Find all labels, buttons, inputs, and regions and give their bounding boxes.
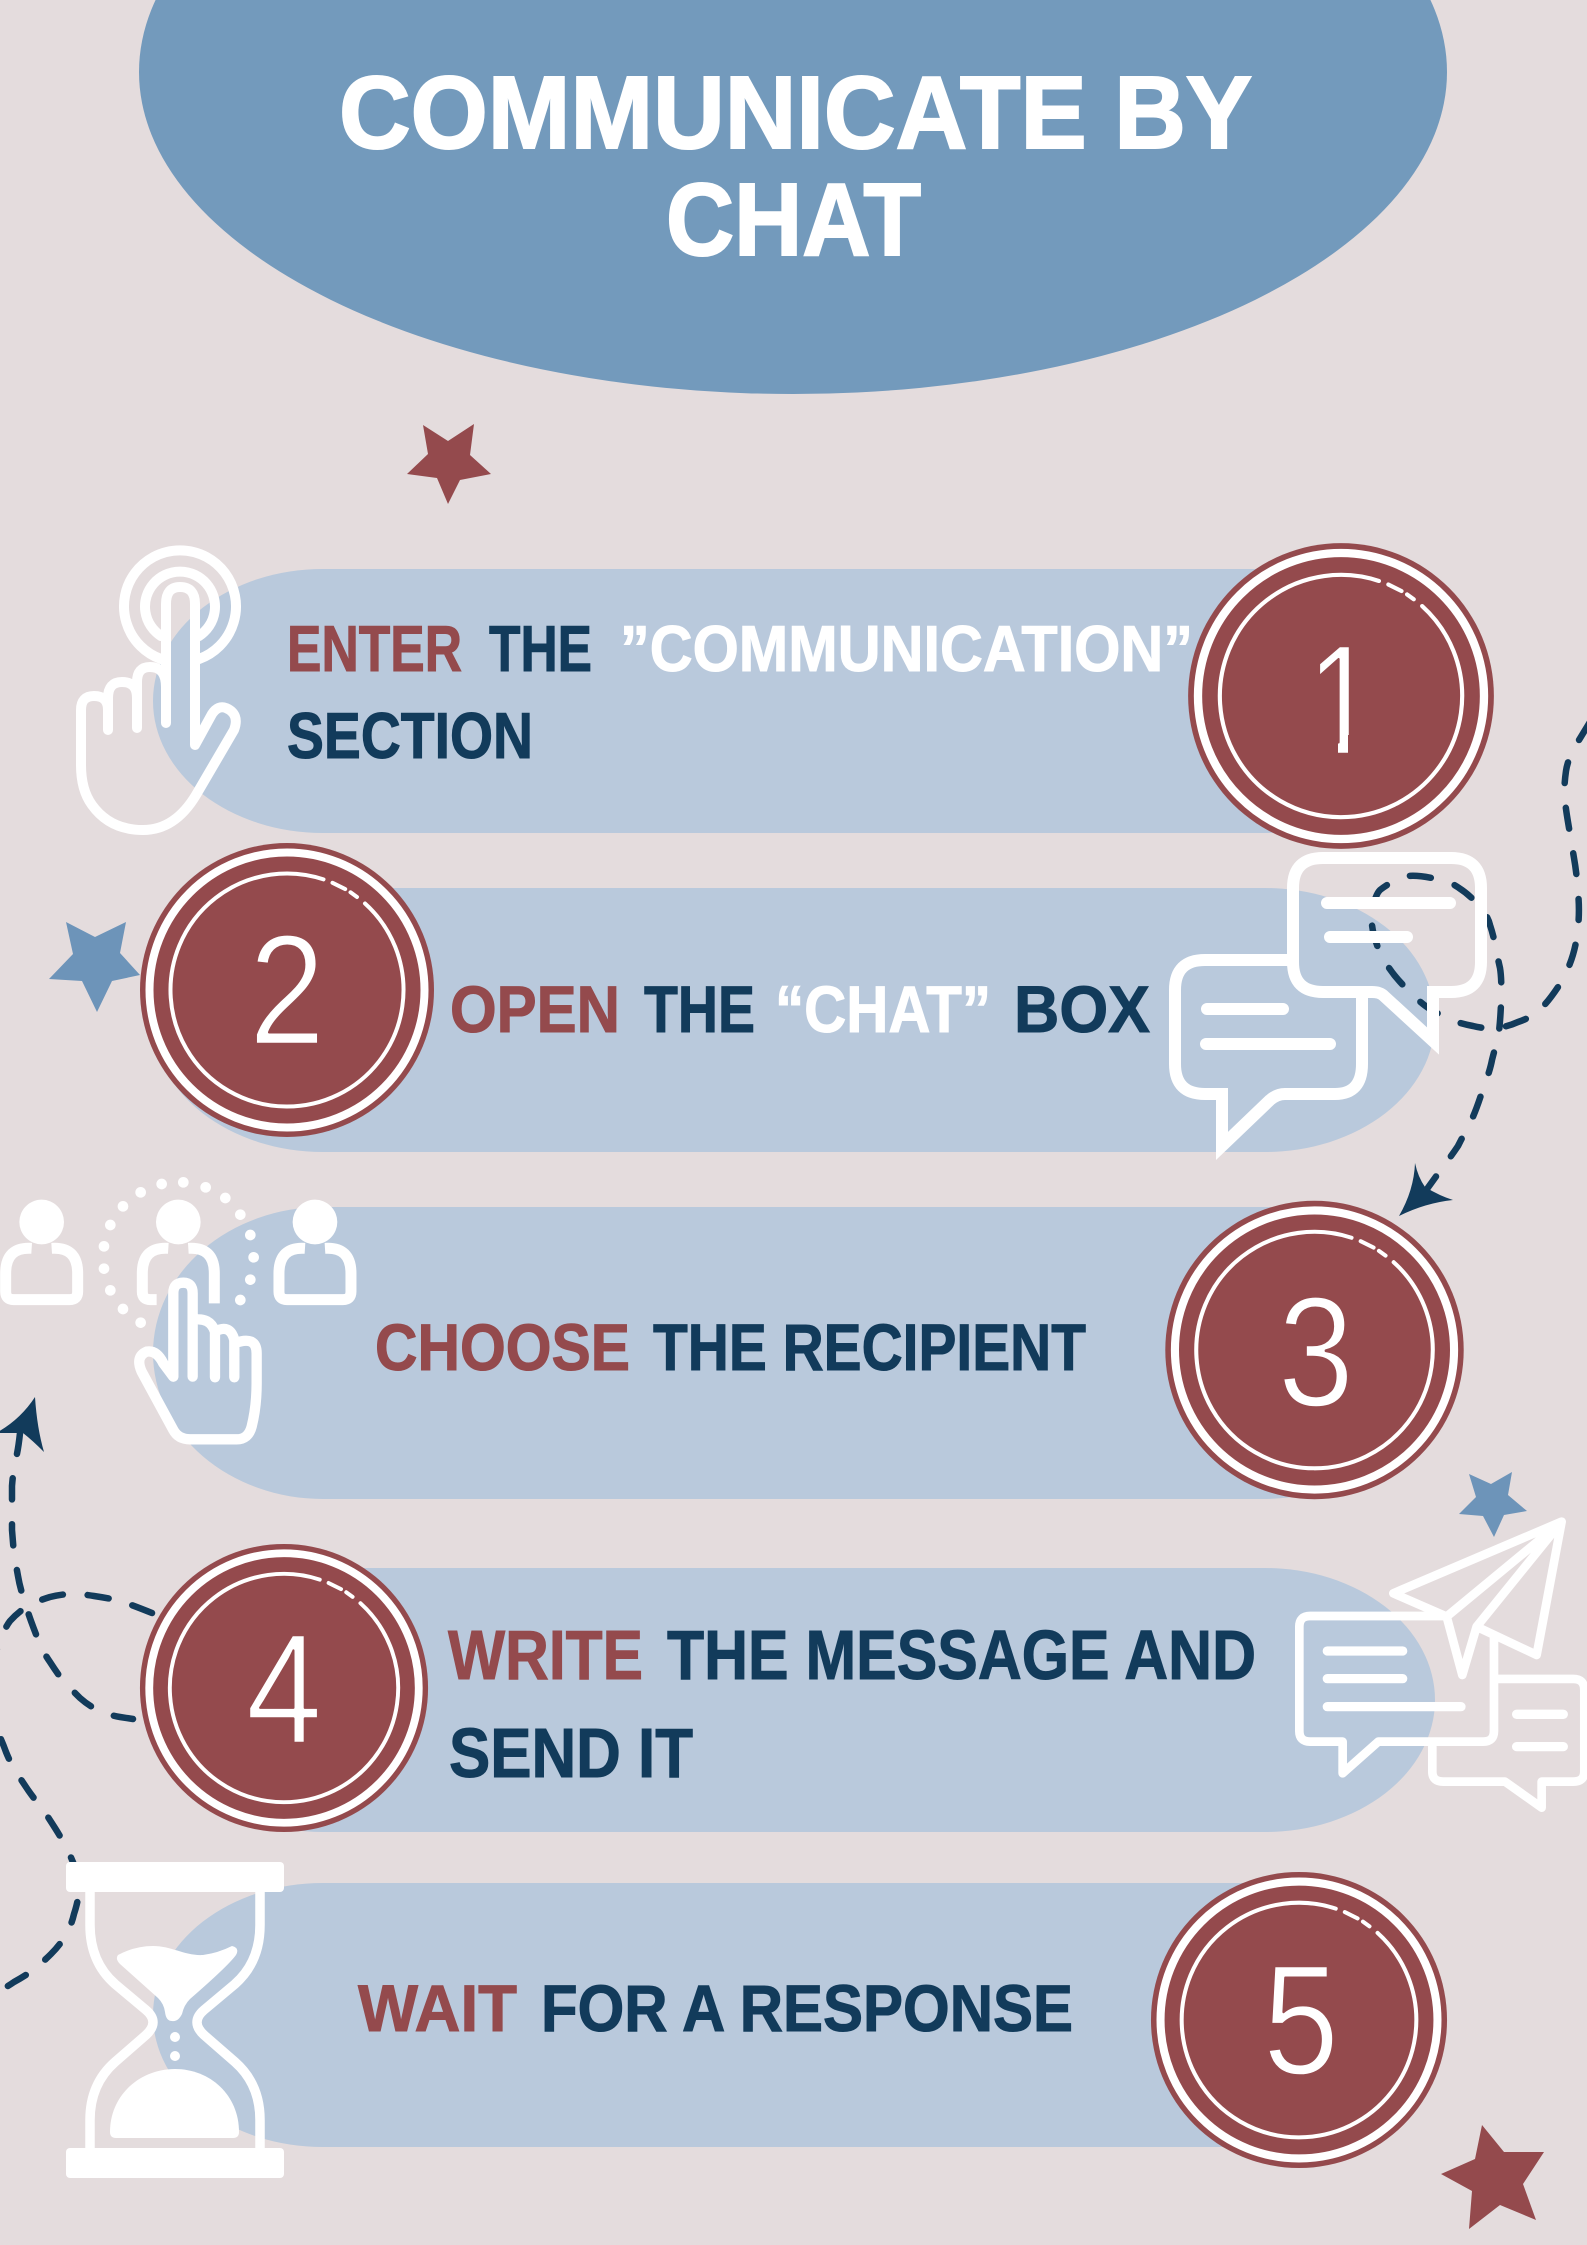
step 5 text: WAIT — [358, 1971, 517, 2045]
paper plane — [1393, 1522, 1562, 1675]
step 2 text: BOX — [1014, 972, 1150, 1046]
badge: number 2 — [140, 843, 434, 1137]
step 1 text: THE — [489, 612, 592, 685]
badge digits: 2 — [249, 903, 325, 1078]
star: blue left — [49, 922, 140, 1012]
arrowhead left — [0, 1397, 44, 1452]
step 2 text — [450, 972, 1150, 1046]
large message bubble — [1299, 1616, 1494, 1773]
icon: tapping hand — [81, 550, 236, 830]
title: CHAT — [666, 162, 921, 277]
step 4 text: SEND IT — [449, 1714, 693, 1792]
step 5 text: FOR A RESPONSE — [541, 1971, 1073, 2045]
pill: step 2 — [153, 888, 1435, 1152]
person heads — [19, 1200, 337, 1244]
star: blue right — [1459, 1472, 1527, 1537]
step 1 text: ENTER — [287, 612, 462, 685]
pill: step 1 — [153, 569, 1433, 833]
icon: hourglass — [66, 1862, 284, 2178]
hourglass glass walls — [90, 1888, 260, 2152]
arrow: dashed path right — [1372, 722, 1587, 1216]
step 1 text — [287, 612, 1193, 772]
person bodies — [6, 1248, 351, 1303]
arrow: dashed path left — [0, 1397, 152, 2000]
step 5 text — [358, 1971, 1073, 2045]
hourglass bars — [66, 1862, 284, 1892]
step 3 text: THE RECIPIENT — [653, 1310, 1086, 1384]
badge digits: 1 — [1307, 613, 1377, 788]
title: COMMUNICATE BY — [339, 55, 1252, 170]
arrowhead right — [1399, 1163, 1453, 1216]
badge digits: 4 — [246, 1602, 322, 1777]
step 4 text: THE MESSAGE AND — [667, 1616, 1256, 1694]
badge digits — [246, 613, 1384, 2108]
dotted selection ring — [99, 1177, 259, 1328]
pill: step 3 — [153, 1207, 1433, 1499]
icon: people with pointing hand — [6, 1177, 351, 1439]
badge: number 3 — [1165, 1201, 1464, 1499]
badge: number 5 — [1151, 1872, 1447, 2168]
header ellipse — [139, 0, 1447, 394]
badge digits: 5 — [1263, 1933, 1339, 2108]
title — [339, 55, 1252, 277]
step 4 text: WRITE — [448, 1616, 643, 1694]
pill: step 5 — [153, 1883, 1433, 2147]
hourglass sand — [117, 1946, 237, 2021]
step 3 text — [375, 1310, 1086, 1384]
step 1 text: SECTION — [287, 699, 533, 772]
step 2 text: OPEN — [450, 972, 620, 1046]
badge digits: 3 — [1278, 1265, 1354, 1440]
star: maroon bottom right — [1441, 2125, 1544, 2229]
step 2 text: “CHAT” — [775, 972, 991, 1046]
step 3 text: CHOOSE — [375, 1310, 630, 1384]
step 2 text: THE — [644, 972, 755, 1046]
step 1 text: ”COMMUNICATION” — [620, 612, 1193, 685]
icon: chat bubbles — [1175, 858, 1481, 1146]
star: maroon top — [407, 424, 491, 504]
pill: step 4 — [153, 1568, 1435, 1832]
small message bubble — [1432, 1679, 1584, 1808]
pointing hand — [139, 1283, 257, 1439]
step 4 text — [448, 1616, 1256, 1792]
icon: paper plane and message bubbles — [1299, 1522, 1584, 1808]
badge: number 4 — [140, 1544, 428, 1832]
badge: number 1 — [1188, 543, 1494, 849]
